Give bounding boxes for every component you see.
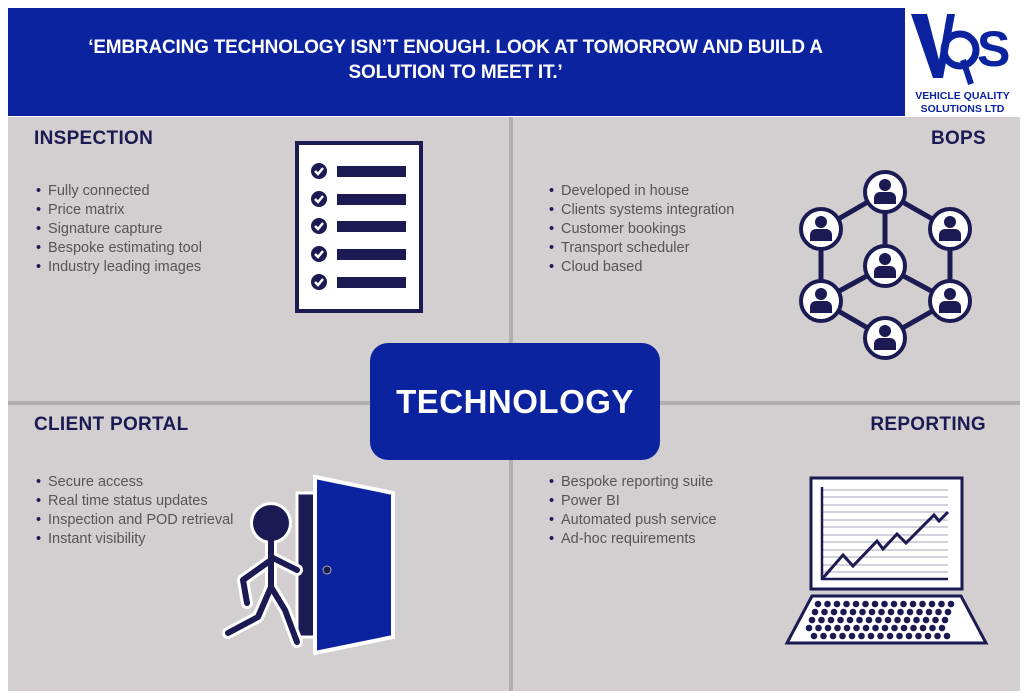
list: bops: Customer bookings	[561, 221, 686, 237]
panel: bops	[550, 128, 986, 275]
heading: client portal: CLIENT PORTAL	[34, 414, 188, 435]
list: inspection	[36, 183, 202, 275]
heading: reporting: REPORTING	[870, 414, 986, 435]
list: client portal: Real time status updates	[48, 493, 208, 509]
icon: network	[799, 170, 972, 360]
list: bops: Developed in house	[561, 183, 689, 199]
list: bops	[550, 183, 734, 275]
heading: bops: BOPS	[931, 128, 986, 149]
panel: client portal	[34, 414, 233, 547]
list: reporting: Power BI	[561, 493, 620, 509]
center badge: technology: TECHNOLOGY	[396, 383, 634, 420]
center badge: technology	[370, 343, 660, 460]
list: client portal	[36, 474, 233, 547]
icon: laptop chart	[784, 476, 988, 644]
list: client portal: Instant visibility	[48, 531, 146, 547]
list: reporting: Ad-hoc requirements	[561, 531, 696, 547]
list: inspection: Price matrix	[48, 202, 125, 218]
list: bops: Transport scheduler	[561, 240, 689, 256]
logo: S	[977, 21, 1010, 77]
icon: checklist	[295, 141, 423, 313]
list: reporting: Automated push service	[561, 512, 717, 528]
heading: inspection: INSPECTION	[34, 128, 153, 149]
title quote: ‘EMBRACING TECHNOLOGY ISN’T ENOUGH. LOOK AT TOMORROW AND BUILD A	[88, 37, 823, 58]
logo text: SOLUTIONS LTD	[921, 103, 1004, 115]
panel: reporting	[550, 414, 986, 547]
icon: person entering door	[222, 474, 395, 656]
list: reporting: Bespoke reporting suite	[561, 474, 713, 490]
logo text: VEHICLE QUALITY	[915, 90, 1010, 102]
list: client portal: Inspection and POD retrieval	[48, 512, 233, 528]
title quote: SOLUTION TO MEET IT.’	[349, 62, 562, 83]
panel: inspection	[34, 128, 202, 275]
logo text	[915, 90, 1010, 115]
list: inspection: Industry leading images	[48, 259, 201, 275]
list: inspection: Bespoke estimating tool	[48, 240, 202, 256]
list: inspection: Signature capture	[48, 221, 162, 237]
title quote	[88, 37, 823, 83]
list: inspection: Fully connected	[48, 183, 150, 199]
list: bops: Cloud based	[561, 259, 642, 275]
list: client portal: Secure access	[48, 474, 143, 490]
list: reporting	[550, 474, 717, 547]
header banner	[8, 8, 905, 116]
list: bops: Clients systems integration	[561, 202, 734, 218]
logo	[905, 8, 1020, 116]
